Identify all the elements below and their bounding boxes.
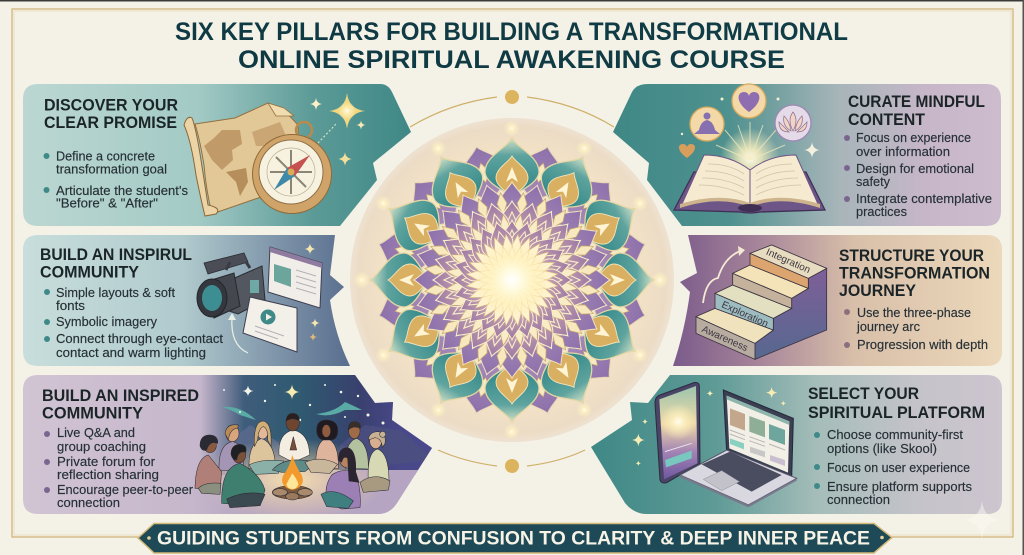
heading: curate [848,93,985,129]
icon: lesson window [268,247,322,308]
icon: phone [655,382,700,483]
arrow: rising journey [703,246,745,303]
heading: select [808,385,985,422]
sparkles [632,387,786,466]
icon: compass [252,122,332,214]
icon: treasure map [184,103,300,216]
heading: structure: JOURNEY [839,282,916,300]
heading: structure: TRANSFORMATION [839,264,990,282]
icon: guiding star [310,93,366,166]
panel: build an inspirul community [23,235,350,366]
bullets: structure: Progression with depth [857,338,988,352]
bullets: select: Choose community-first [827,428,964,442]
title: SIX KEY PILLARS FOR BUILDING A TRANSFORMATIONAL [175,18,848,46]
bullets: inspired: Encourage peer-to-peer [57,483,193,497]
bullets: discover [44,150,188,210]
bullets: inspired: group coaching [57,440,146,454]
bullets: inspired: connection [57,496,120,510]
icon: heart badge [732,84,766,118]
title [175,18,848,74]
sparkle dots [353,120,669,440]
heading: discover: DISCOVER YOUR [44,96,178,114]
illustration: staircase journey: Integration [764,247,812,276]
panel: curate mindful content [613,84,1001,226]
bullets: inspired: Private forum for [57,455,155,469]
panel: structure your transformation journey [673,235,1002,366]
illustration: phone and laptop [632,382,797,507]
heading: curate: CURATE MINDFUL [848,93,985,111]
heading: inspirul: COMMUNITY [40,264,139,282]
heading: select: SELECT YOUR [808,385,919,403]
bullets: inspirul: fonts [56,299,85,313]
bullets: discover: "Before" & "After" [56,196,158,210]
illustration: staircase journey [696,245,827,359]
bullets: discover: Articulate the student's [56,184,188,198]
bullets: select: Ensure platform supports [827,480,972,494]
panel: discover your clear promise [23,84,411,226]
bullets: inspired: Live Q&A and [57,426,135,440]
heading: discover [44,96,178,132]
icon: lotus badge [775,105,811,141]
heading: inspirul [40,246,192,282]
bullets: curate: safety [856,175,891,189]
bullets: inspirul: contact and warm lighting [56,346,206,360]
mandala petals [343,111,681,449]
heading: inspired [42,387,199,422]
bullets: curate: Focus on experience [856,131,971,145]
heading: inspired: BUILD AN INSPIRED [42,387,199,405]
bullets: discover: Define a concrete [56,150,155,164]
bullets: curate: over information [856,145,950,159]
icon: meditation badge [690,107,724,141]
bullets: structure: journey arc [856,320,920,334]
heading: structure [839,247,990,300]
banner: GUIDING STUDENTS FROM CONFUSION TO CLARITY & DEEP INNER PEACE [157,528,870,550]
heading: curate: CONTENT [848,111,925,129]
bullets: structure [844,306,988,352]
bullets: inspirul: Simple layouts & soft [56,286,176,300]
heading: select: SPIRITUAL PLATFORM [808,404,985,422]
icon: video camera [197,253,265,318]
night sky scene [203,375,432,514]
bullets: curate: practices [856,205,907,219]
icon: video player window [243,297,297,352]
illustration: staircase journey: Awareness [700,324,749,354]
heading: structure: STRUCTURE YOUR [839,247,984,265]
bullets: inspirul [44,286,224,360]
ornament: bottom arc and diamond [438,450,585,473]
bullets: inspired: reflection sharing [57,468,159,482]
illustration: people around campfire [195,413,390,509]
panel: build an inspired community [23,375,440,522]
icon: laptop [680,390,797,507]
bullets: inspired [44,426,193,510]
panel: select your spiritual platform [591,375,1002,514]
bullets: curate: Design for emotional [856,162,974,176]
bullets: inspirul: Connect through eye-contact [56,332,224,346]
bullets: curate: Integrate contemplative [856,192,992,206]
bullets: select [814,428,972,507]
bullets: structure: Use the three-phase [857,306,971,320]
bullets: curate [844,131,992,219]
bullets: select: Focus on user experience [827,461,970,475]
bullets: discover: transformation goal [56,162,167,176]
heading: discover: CLEAR PROMISE [44,114,177,132]
icon: open book with light rays [674,122,825,213]
title: ONLINE SPIRITUAL AWAKENING COURSE [238,46,785,74]
bullets: inspirul: Symbolic imagery [56,315,158,329]
ornament: top arc and diamond [410,90,614,127]
icon: watermark sparkle [963,501,1001,539]
heading: inspirul: BUILD AN INSPIRUL [40,246,192,264]
icon: small heart and sparkles [679,98,820,158]
heading: inspired: COMMUNITY [42,404,143,422]
bullets: select: connection [827,493,890,507]
arrow: curved loop [228,244,320,353]
central mandala [343,111,681,449]
bullets: select: options (like Skool) [827,442,937,456]
illustration: staircase journey: Exploration [720,300,770,330]
